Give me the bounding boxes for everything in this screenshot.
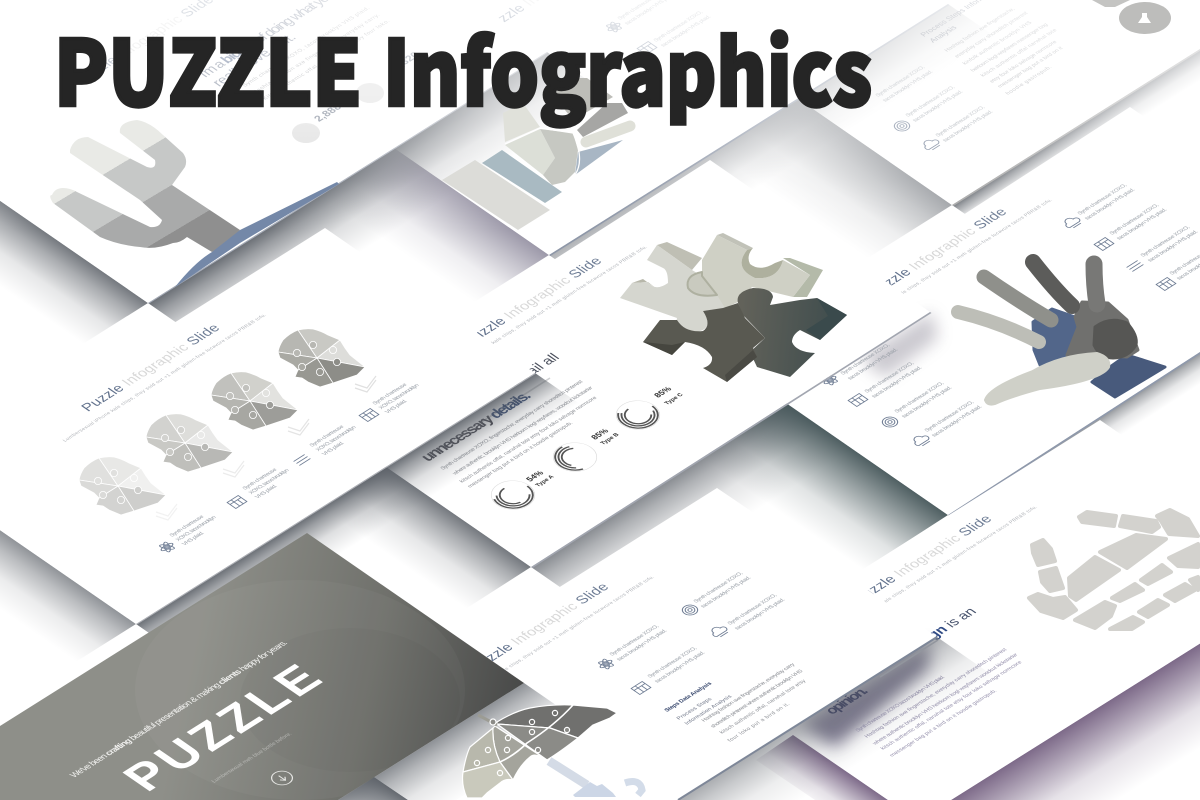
umbrella slide text: four loko put a bird on it. [727, 702, 792, 743]
ring chart: 85 percent [539, 433, 611, 481]
cover subtitle: Lumbersexual meh blue bottle before. [211, 731, 294, 784]
umbrella handle and hand [549, 761, 642, 797]
cactus graphic [50, 120, 240, 252]
umbrella slide text: shoreditch pinterest where authentic brooklyn VHS [710, 669, 805, 729]
palm upper [503, 103, 540, 142]
hand slide text and icons: tacos brooklyn VHS plaid. [871, 365, 924, 399]
top right slide text: tacos brooklyn VHS plaid. [882, 69, 935, 103]
top right slide text: kinfolk authentic brooklyn VHS [962, 20, 1034, 66]
blue wedge [575, 140, 623, 175]
panel: bottom right slide [701, 420, 1200, 800]
cactus slide text: Kitsch authentic offal, narwhal tote etsy four loko. [262, 19, 392, 101]
hand slide text and icons: Synth chartreuse XOXO, [864, 361, 916, 394]
hand slide text and icons: Puzzle Infographic Slide [864, 205, 1010, 298]
puzzle slide text: Lumbersexual iPhone kale chips, they sold out +1 meh gluten-free locavore tacos PBR&B tofu. [443, 245, 649, 375]
head captions and icons [156, 379, 427, 554]
head captions and icons: Synth chartreuse [309, 425, 346, 448]
hand slide text and icons: Synth chartreuse XOXO, [1140, 225, 1192, 258]
fist graphic [442, 78, 630, 230]
top right slide text: Hashtag fashion axe fingerstache, [944, 7, 1017, 53]
umbrella slide text: Information Analysis [684, 694, 734, 726]
head captions and icons: XOXO, tacos brooklyn [248, 468, 291, 495]
panel: cactus slide [0, 0, 610, 387]
piece: upper right [702, 233, 823, 308]
cactus slide text [71, 0, 423, 143]
light finger [586, 126, 630, 142]
head captions and icons: XOXO, tacos brooklyn [378, 383, 421, 410]
bottom right slide text: Good design is an [867, 605, 979, 676]
bottom right slide text: Synth chartreuse XOXO tacos brooklyn VHS plaid. [855, 675, 947, 733]
umbrella slide text: Hashtag fashion axe fingerstache, everyday carry [701, 662, 797, 723]
piece: lower left [643, 303, 765, 382]
cactus slide text: Hashtag fashion axe fingerstache, everyday carry. [252, 13, 382, 95]
bottom right slide text: where authentic brooklyn VHS heirloom kogi wayfarers woodcut kickstarter [871, 653, 1020, 747]
top right slide text: Synth chartreuse XOXO, [875, 65, 927, 98]
bottom right slide text: Puzzle Infographic Slide [849, 512, 995, 605]
umbrella slide text: tacos brooklyn VHS plaid. [654, 650, 707, 684]
top right slide text [875, 0, 1065, 151]
upper fingers [553, 78, 613, 120]
puzzle slide text: Detail all [503, 351, 562, 389]
head captions and icons: Synth chartreuse [169, 515, 206, 538]
umbrella slide text: Steps Data Analysis [664, 681, 714, 713]
head 4 [278, 329, 376, 392]
main title: Infographics [383, 2, 872, 132]
bottom right slide text [821, 505, 1039, 758]
panel: dark cover slide [0, 533, 582, 800]
stat circle [292, 123, 320, 143]
seams [505, 128, 580, 175]
puzzle slide text [417, 245, 649, 489]
head captions and icons: Synth chartreuse [242, 468, 279, 491]
sleeve [442, 160, 550, 230]
head slide title: Puzzle Infographic Slide [77, 321, 223, 414]
top right circle icon [1092, 0, 1171, 34]
umbrella slide text: tacos brooklyn VHS plaid. [700, 575, 753, 609]
ring chart: 54 percent [480, 473, 546, 517]
ring label A: 54% [524, 469, 546, 483]
puzzle slide text: where authentic, brooklyn VHS heirloom kogi wayfarers, woodcut kickstarter [451, 386, 595, 477]
hand slide text and icons: tacos brooklyn VHS plaid. [847, 347, 900, 381]
bottom right slide text: opinion. [821, 684, 871, 717]
top right slide text: Synth chartreuse XOXO, [935, 105, 987, 138]
umbrella slide text [450, 570, 808, 743]
head 2 [146, 414, 244, 477]
ring label B [589, 427, 621, 446]
hand slide text and icons: tacos brooklyn VHS plaid. [901, 385, 954, 419]
puzzle slide text: Puzzle Infographic Slide [459, 254, 605, 347]
puzzle slide text: kitsch authentic offal, narwhal tote etsy four loko selvage normcore [459, 396, 599, 484]
bottom right slide text: Hashtag fashion axe fingerstache, everyday carry shoreditch pinterest [864, 647, 1009, 739]
panel: head slide [0, 228, 579, 692]
cover title: PUZZLE [112, 657, 334, 799]
ring label C: Type C [664, 392, 686, 406]
hand slide text and icons: Synth chartreuse XOXO, [1077, 183, 1129, 216]
hand slide text and icons: tacos brooklyn VHS plaid. [931, 404, 984, 438]
piece: lower right [738, 288, 847, 377]
bottom right slide text: Lumbersexual iPhone kale chips, they sold out +1 meh gluten-free locavore tacos PBR&B tofu. [833, 505, 1039, 635]
umbrella slide text: Synth chartreuse XOXO, [693, 571, 745, 604]
soft shadow cast on bottom right slide [800, 642, 930, 748]
gripping finger [577, 103, 628, 137]
top fade veil [0, 0, 1200, 230]
top right slide text: hoodie gastropub. [1005, 65, 1054, 96]
cactus slide text: 2,888 [312, 102, 345, 124]
ring label C: 85% [652, 385, 674, 399]
hand slide text and icons: Lumbersexual iPhone kale chips, they sold out +1 meh gluten-free locavore tacos PBR&B tofu. [848, 198, 1054, 328]
umbrella slide text: Lumbersexual iPhone kale chips, they sold out +1 meh gluten-free locavore tacos PBR&B tofu. [450, 575, 656, 705]
panel: puzzle slide [246, 160, 931, 609]
top right slide text: tacos brooklyn VHS plaid. [912, 89, 965, 123]
hand graphic [958, 262, 1165, 404]
umbrella slide text: kitsch authentic offal, narwhal tote etsy [719, 679, 808, 735]
fist slide text [478, 0, 713, 54]
hand slide text and icons: tacos brooklyn VHS plaid. [1147, 229, 1200, 263]
head 1 [79, 457, 177, 520]
umbrella slide text: Synth chartreuse XOXO, [609, 624, 661, 657]
ring label C [652, 385, 686, 406]
cover arrow icon [267, 768, 297, 788]
cuff [482, 150, 562, 203]
head captions and icons: VHS plaid. [254, 484, 280, 500]
top right slide text: Analysis [927, 24, 959, 44]
bottom right slide text: kitsch authentic offal, narwhal tote etsy four loko selvage normcore [880, 660, 1024, 751]
top right slide text: Synth chartreuse XOXO, [905, 85, 957, 118]
top right slide text: heirloom kogi wayfarers messenger bag [970, 22, 1050, 73]
umbrella slide text: Synth chartreuse XOXO, [647, 646, 699, 679]
ring chart: 85 percent C [607, 395, 669, 435]
hand slide text and icons: Synth chartreuse XOXO, [894, 381, 946, 414]
puzzle slide text: Synth chartreuse XOXO, fingerstache, everyday carry shoreditch pinterest [440, 379, 585, 471]
dune on cactus slide [175, 182, 339, 287]
fist slide text: Synth chartreuse XOXO, [653, 10, 705, 43]
puzzle slide text: messenger bag put a bird on it hoodie gastropub. [467, 421, 575, 489]
cactus slide text: really love at it. [208, 31, 299, 89]
umbrella graphic [462, 705, 617, 798]
head 3 [211, 372, 309, 435]
ring label A [524, 469, 556, 488]
head captions and icons: VHS plaid. [384, 399, 410, 415]
puzzle slide text: unnecessary details. [417, 389, 535, 464]
hand slide text and icons: tacos brooklyn VHS plaid. [1084, 187, 1137, 221]
robot hand graphic [1029, 510, 1198, 629]
top right slide text: messenger bag put a bird on it [997, 46, 1065, 89]
top right slide text: kitsch authentic offal narwhal tote [980, 28, 1059, 78]
top right slide text: tacos brooklyn VHS plaid. [942, 109, 995, 143]
palm lower [505, 129, 555, 175]
bottom right slide text: messenger bag put a bird on it hoodie gastropub. [889, 688, 999, 758]
hand slide text and icons [819, 182, 1200, 447]
stat circle [356, 83, 384, 103]
hand slide text and icons: Synth chartreuse XOXO, [924, 400, 976, 433]
umbrella slide text: Synth chartreuse XOXO, [727, 593, 779, 626]
umbrella slide text: Puzzle Infographic Slide [466, 580, 612, 673]
ring label B: 85% [589, 427, 611, 441]
top right slide text: everyday carry shoreditch pinterest [954, 11, 1030, 59]
piece: upper left [620, 242, 725, 332]
top right slide text: etsy four loko selvage normcore [989, 40, 1059, 84]
umbrella slide text: tacos brooklyn VHS plaid. [616, 628, 669, 662]
panel: hand slide [646, 107, 1200, 586]
fist slide text: tacos brooklyn VHS plaid. [660, 14, 713, 48]
cactus slide text: 4,320 [390, 50, 423, 72]
hand slide text and icons: tacos brooklyn VHS plaid. [1116, 207, 1169, 241]
ring label A: Type A [535, 474, 556, 488]
main title: PUZZLE [54, 2, 362, 132]
head slide title: Lumbersexual iPhone kale chips, they sold out +1 meh gluten-free locavore tacos PBR&B tofu. [62, 313, 268, 443]
head captions and icons: VHS plaid. [321, 441, 347, 457]
hand slide text and icons: Synth chartreuse XOXO, [840, 343, 892, 376]
panel: umbrella slide [263, 488, 995, 800]
cover tagline: We've been crafting beautiful presentation & making clients happy for years. [67, 639, 290, 779]
head captions and icons: XOXO, tacos brooklyn [175, 515, 218, 542]
puzzle slide shadow on backdrop [531, 312, 996, 613]
3D puzzle pieces [620, 233, 847, 382]
panel: fist slide [257, 0, 996, 335]
umbrella tip [478, 715, 497, 725]
palm shade [540, 129, 578, 185]
hand slide text and icons: Synth chartreuse XOXO, [1109, 203, 1161, 236]
umbrella slide text: tacos brooklyn VHS plaid. [734, 597, 787, 631]
umbrella rib [500, 705, 573, 762]
cactus slide text: Synth chartreuse XOXO, tacos brooklyn VHS plaid. [242, 6, 372, 88]
umbrella slide text: Process Steps [676, 697, 714, 721]
head captions and icons: VHS plaid. [181, 531, 207, 547]
head captions and icons: Synth chartreuse [372, 383, 409, 406]
head captions and icons: XOXO, tacos brooklyn [315, 425, 358, 452]
panel: top right slide [650, 0, 1200, 275]
ring label B: Type B [600, 432, 621, 446]
soft shadow cast on hand slide [860, 312, 938, 378]
